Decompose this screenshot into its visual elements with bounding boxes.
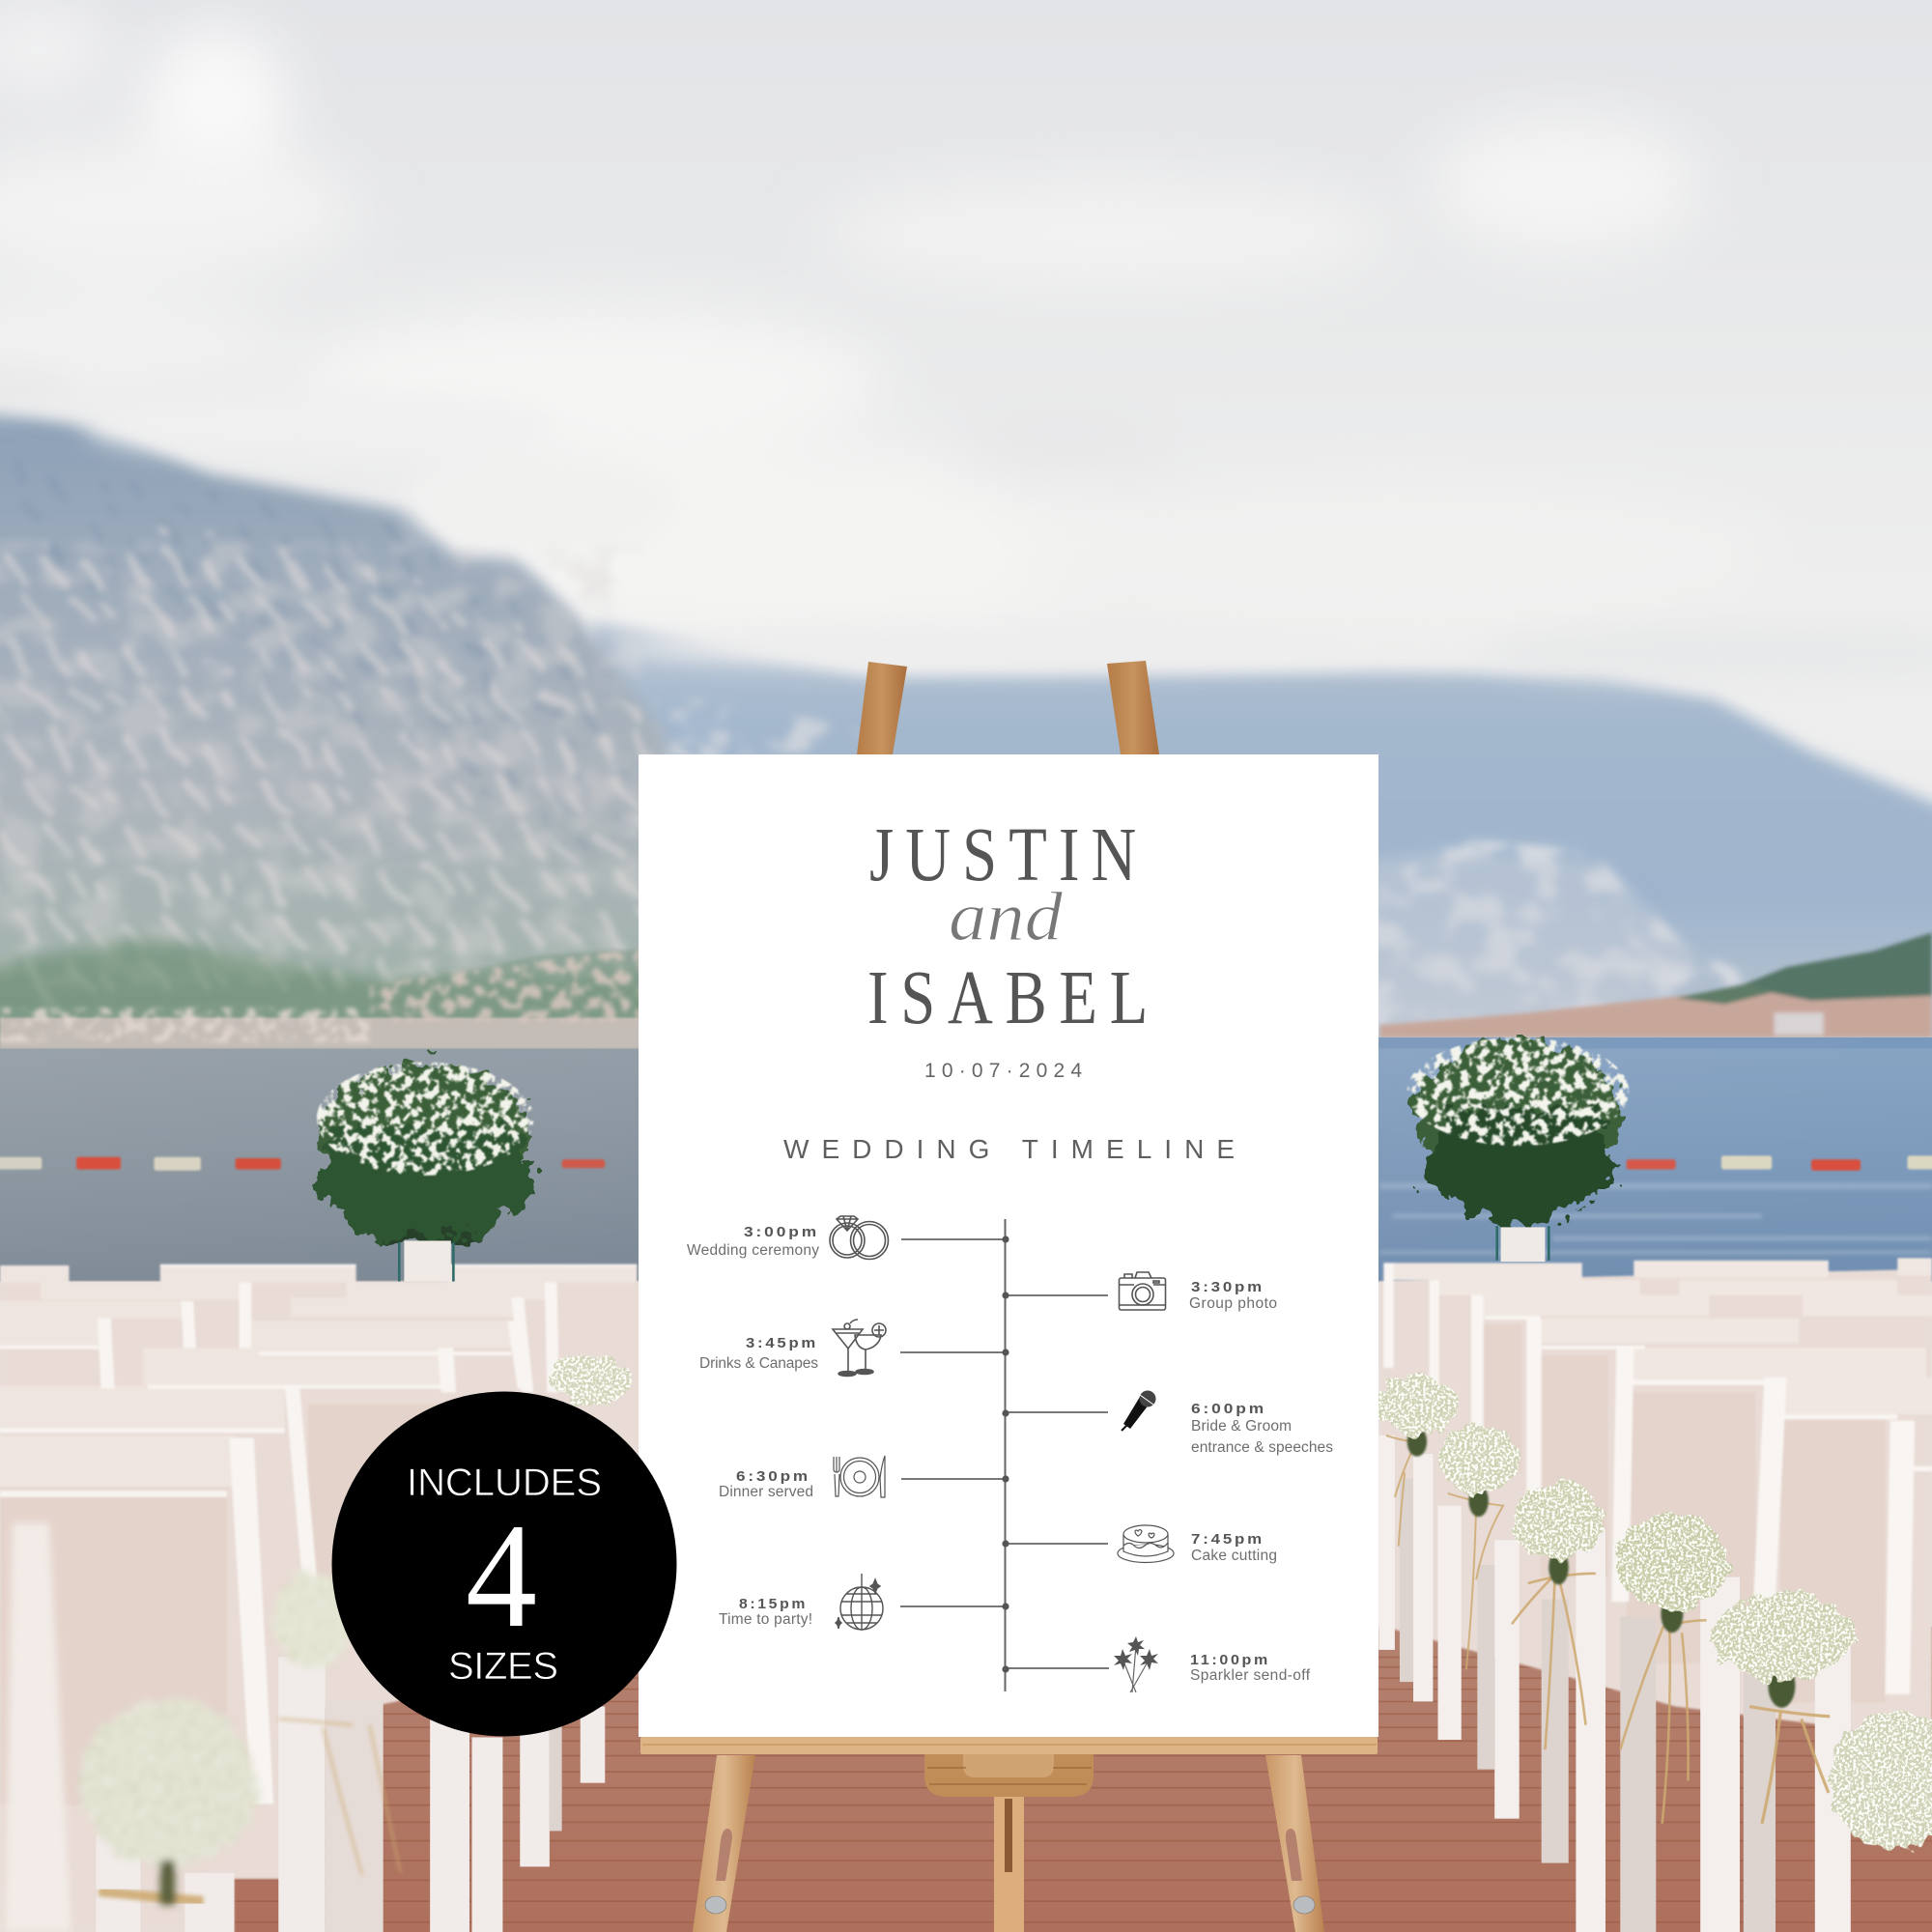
event: sparkler send-off: 11:00pm	[1190, 1652, 1270, 1668]
easel shelf	[640, 1737, 1378, 1754]
event: sparkler send-off: Sparkler send-off	[1190, 1667, 1311, 1684]
event: speeches	[1191, 1401, 1333, 1456]
event: cake cutting: 7:45pm	[1191, 1531, 1264, 1548]
badge: includes 4 sizes	[332, 1391, 676, 1737]
chair panels right	[1479, 1324, 1886, 1703]
title: ISABEL: ISABEL	[867, 955, 1148, 1039]
event: speeches: Bride & Groom	[1191, 1418, 1292, 1435]
icon: cocktails	[833, 1320, 886, 1376]
flower arrangement left	[314, 1062, 540, 1246]
badge numeral: 4: 4	[466, 1492, 537, 1659]
left aisle pillars	[96, 1658, 605, 1932]
event: dinner: Dinner served	[719, 1484, 813, 1500]
event: group photo	[1189, 1279, 1277, 1312]
bouquet stems	[1407, 1427, 1795, 1708]
event: wedding ceremony: Wedding ceremony	[687, 1242, 819, 1259]
event: group photo: 3:30pm	[1191, 1279, 1264, 1295]
straw ribbon ties	[99, 1435, 1830, 1901]
right aisle pillars	[1378, 1435, 1851, 1932]
heading: wedding timeline: WEDDING TIMELINE	[783, 1134, 1235, 1164]
date: 10·07·2024	[924, 1060, 1082, 1082]
back mountain range	[591, 622, 1932, 1047]
event: dinner: 6:30pm	[736, 1468, 810, 1485]
event: cake cutting: Cake cutting	[1191, 1548, 1277, 1564]
left chairs	[0, 1264, 640, 1932]
swim line buoys	[0, 1155, 1932, 1171]
poster board	[639, 754, 1378, 1737]
lake water	[0, 1037, 1932, 1283]
icon: sparklers	[1114, 1636, 1158, 1692]
vase right	[1495, 1226, 1550, 1262]
cloud edge over mountains	[0, 363, 1932, 683]
event: dinner	[719, 1468, 813, 1500]
flower arrangement right	[1407, 1037, 1629, 1226]
timeline axis with connectors and dots	[900, 1219, 1109, 1691]
event: drinks: 3:45pm	[746, 1335, 818, 1351]
icon: wedding rings	[830, 1216, 889, 1260]
event: sparkler send-off	[1190, 1652, 1311, 1684]
event: wedding ceremony: 3:00pm	[744, 1224, 819, 1240]
event: cake cutting	[1191, 1531, 1277, 1564]
event: wedding ceremony	[687, 1224, 819, 1259]
icon: cake	[1118, 1525, 1174, 1563]
baby's breath bouquets right	[551, 1355, 1932, 1848]
easel upper posts	[857, 661, 1159, 754]
baby's breath bouquets left, out of focus	[80, 1571, 356, 1905]
icon: microphone	[1122, 1391, 1155, 1431]
right green hill and town	[1380, 933, 1932, 1037]
icon: disco ball	[836, 1574, 883, 1630]
script word: and: and	[949, 878, 1064, 955]
right chairs	[1378, 1258, 1932, 1749]
event: drinks	[699, 1335, 818, 1372]
event: party: 8:15pm	[739, 1596, 808, 1612]
easel legs and strut	[693, 1755, 1324, 1932]
easel bracket	[924, 1751, 1094, 1797]
badge text: includes: INCLUDES	[407, 1462, 602, 1504]
event: drinks: Drinks & Canapes	[699, 1355, 818, 1372]
left rocky mountain	[0, 401, 702, 1047]
icon: camera	[1119, 1272, 1166, 1310]
event: speeches: 6:00pm	[1191, 1401, 1266, 1417]
event: speeches: entrance & speeches	[1191, 1439, 1333, 1456]
title: JUSTIN: JUSTIN	[869, 812, 1136, 896]
easel wing nuts	[705, 1896, 1315, 1914]
event: group photo: Group photo	[1189, 1295, 1277, 1312]
event: party	[719, 1596, 812, 1628]
badge text: sizes: SIZES	[448, 1645, 558, 1688]
wooden deck	[185, 1627, 1932, 1932]
chair panels left	[0, 1399, 518, 1805]
vase left	[398, 1240, 455, 1282]
icon: plate and cutlery	[834, 1456, 885, 1497]
sky with clouds	[0, 0, 1932, 863]
left town on shore	[0, 949, 653, 1048]
event: party: Time to party!	[719, 1611, 812, 1628]
